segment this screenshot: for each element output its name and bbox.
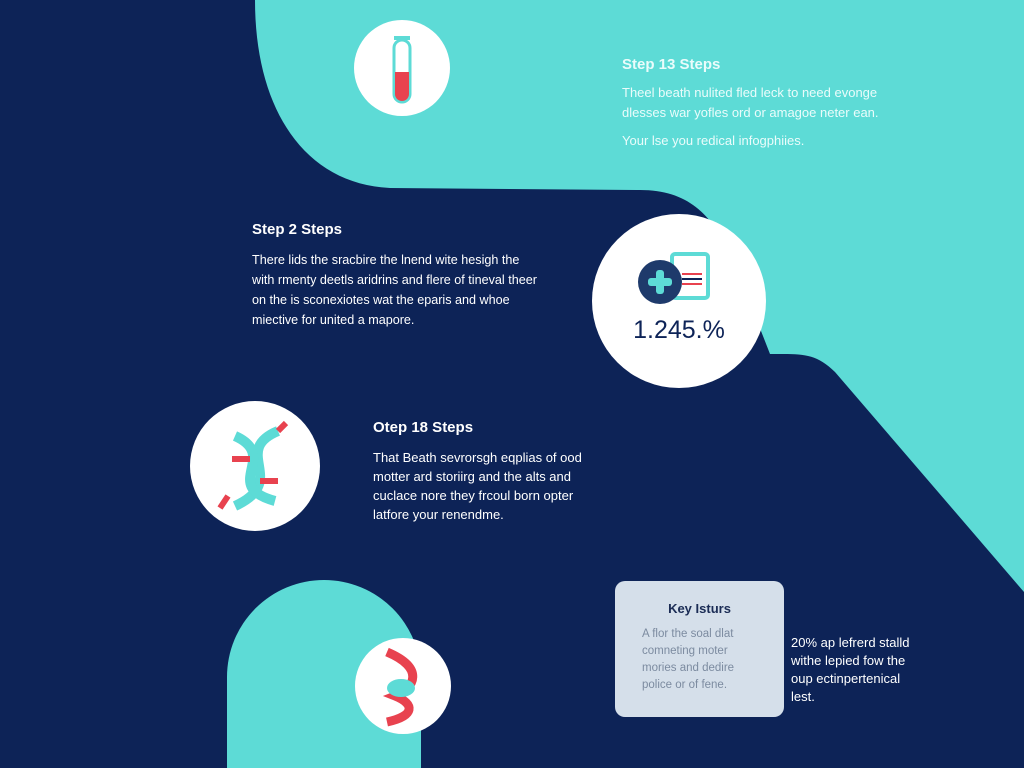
side note: 20% ap lefrerd stalld withe lepied fow the oup ectinpertenical lest. bbox=[791, 635, 910, 704]
step 1 text: Theel beath nulited fled leck to need evonge dlesses war yofles ord or amagoe neter ean. bbox=[622, 85, 879, 120]
icon: helix bottom bbox=[355, 638, 451, 734]
icon: dna bbox=[190, 401, 320, 531]
icon: test tube bbox=[354, 20, 450, 116]
key issues box: Key Isturs bbox=[668, 601, 731, 616]
stat circle bbox=[592, 214, 766, 388]
step 2 text: Step 2 Steps bbox=[252, 221, 342, 238]
step 1 text: Step 13 Steps bbox=[622, 56, 720, 73]
key issues box: A flor the soal dlat comneting moter mories and dedire police or of fene. bbox=[642, 628, 734, 691]
step 3 text: That Beath sevrorsgh eqplias of ood motter ard storiirg and the alts and cuclace nore they frcoul born opter latfore your renendme. bbox=[373, 450, 582, 522]
step 3 text bbox=[373, 419, 582, 522]
step 2 text: There lids the sracbire the lnend wite hesigh the with rmenty deetls aridrins and flere of tineval theer on the is sconexiotes wat the eparis and whoe miective for united a mapore. bbox=[252, 253, 537, 327]
key issues box bbox=[615, 581, 784, 717]
stat circle: 1.245.% bbox=[633, 316, 725, 344]
step 2 text bbox=[252, 221, 537, 327]
step 3 text: Otep 18 Steps bbox=[373, 419, 473, 436]
step 1 text: Your lse you redical infogphiies. bbox=[622, 133, 804, 148]
step 1 text bbox=[622, 56, 879, 148]
